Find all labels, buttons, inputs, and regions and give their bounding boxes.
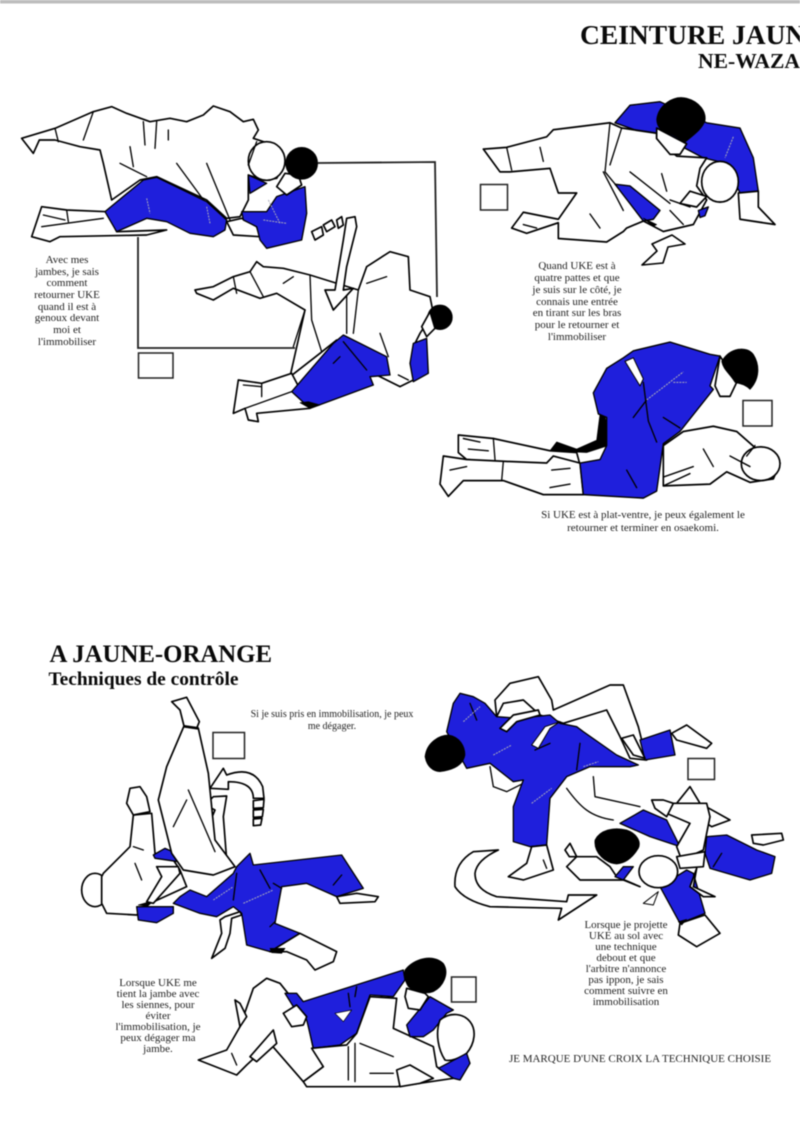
figure: UKE on all fours	[483, 98, 775, 242]
large open frame behind the top-left figures	[138, 162, 437, 348]
text: Lorsque je projette UKE: immobilisation	[593, 996, 660, 1008]
text: Lorsque je projette UKE: une technique	[595, 941, 657, 953]
text: Avec mes jambes: comment	[47, 277, 87, 289]
title: Ceinture Jaune: CEINTURE JAUN	[580, 19, 800, 50]
subheading: Techniques de contrôle: Techniques de contrôle	[48, 669, 239, 690]
arrow: curved escape direction	[210, 768, 264, 798]
checkbox: throw technique	[688, 758, 714, 780]
heading: A Jaune-Orange: A JAUNE-ORANGE	[50, 641, 272, 668]
text: Lorsque je projette UKE: comment suivre en	[584, 985, 668, 997]
text: Avec mes jambes: genoux devant	[35, 312, 99, 324]
text: Si je suis pris en immobilisation: me dégager.	[308, 721, 356, 732]
text: Lorsque je projette UKE: debout et que	[596, 952, 656, 964]
text: Lorsque UKE me tient la jambe: Lorsque UKE me	[119, 977, 197, 989]
text: Quand UKE est à quatre pattes: pour le retourner et	[535, 319, 619, 331]
text: Quand UKE est à quatre pattes: quatre pattes et que	[534, 272, 620, 284]
text: Lorsque UKE me tient la jambe: jambe.	[142, 1043, 173, 1055]
figure: throw into immobilisation	[425, 677, 783, 947]
text: Si UKE est à plat-ventre: Si UKE est à plat-ventre, je peux également le	[541, 509, 745, 521]
text: Avec mes jambes: moi et	[53, 324, 81, 336]
text: Lorsque je projette UKE: UKE au sol avec	[589, 930, 663, 942]
text: Lorsque je projette UKE: pas ippon, je sais	[588, 974, 664, 986]
text: Si UKE est à plat-ventre: retourner et terminer en osaekomi.	[567, 522, 719, 534]
text: Lorsque UKE me tient la jambe: l'immobilisation, je	[115, 1021, 201, 1033]
text: Lorsque UKE me tient la jambe: tient la jambe avec	[117, 988, 199, 1000]
figure: UKE flat on stomach	[440, 342, 780, 498]
text: Avec mes jambes: retourner UKE	[34, 289, 100, 301]
checkbox: first technique	[138, 353, 173, 378]
checkbox: leg escape technique	[452, 977, 476, 1002]
text: Avec mes jambes: l'immobiliser	[38, 336, 96, 348]
subtitle: Ne-Waza: NE-WAZA	[698, 49, 800, 73]
checkbox: flat on stomach technique	[743, 400, 772, 426]
text: Lorsque UKE me tient la jambe: les siennes, pour	[121, 999, 195, 1011]
text: Lorsque je projette UKE: Lorsque je projette	[584, 919, 668, 931]
text: Lorsque UKE me tient la jambe: éviter	[145, 1010, 171, 1022]
text: Quand UKE est à quatre pattes: en tirant sur les bras	[533, 307, 621, 319]
text: Quand UKE est à quatre pattes: Quand UKE est à	[538, 260, 616, 272]
checkbox: escape technique	[213, 732, 244, 758]
text: Avec mes jambes: quand il est à	[38, 301, 96, 313]
text: Quand UKE est à quatre pattes: l'immobiliser	[548, 331, 606, 343]
text: Lorsque UKE me tient la jambe: peux dégager ma	[120, 1032, 196, 1044]
text: Si je suis pris en immobilisation: Si je suis pris en immobilisation, je peux	[251, 709, 413, 720]
figure: freeing the leg	[198, 958, 474, 1087]
text: Avec mes jambes: Avec mes	[46, 254, 88, 266]
checkbox: all fours technique	[480, 184, 508, 210]
text: Quand UKE est à quatre pattes: je suis sur le côté, je	[531, 284, 622, 296]
arrow: UKE on all fours	[642, 235, 685, 265]
figure: turning UKE from knees, second pose	[195, 217, 452, 422]
instruction: Je marque d'une croix: JE MARQUE D'UNE CROIX LA TECHNIQUE CHOISIE	[509, 1053, 771, 1065]
text: Quand UKE est à quatre pattes: connais une entrée	[536, 296, 618, 308]
text: Avec mes jambes: jambes, je sais	[34, 266, 99, 278]
arrow: zigzag downward	[325, 217, 357, 310]
figure: escaping an immobilisation	[82, 697, 378, 970]
text: Lorsque je projette UKE: l'arbitre n'annonce	[586, 963, 666, 975]
figure: turning UKE from knees, first pose	[22, 106, 318, 248]
arrow: big curved throw direction	[455, 850, 597, 920]
